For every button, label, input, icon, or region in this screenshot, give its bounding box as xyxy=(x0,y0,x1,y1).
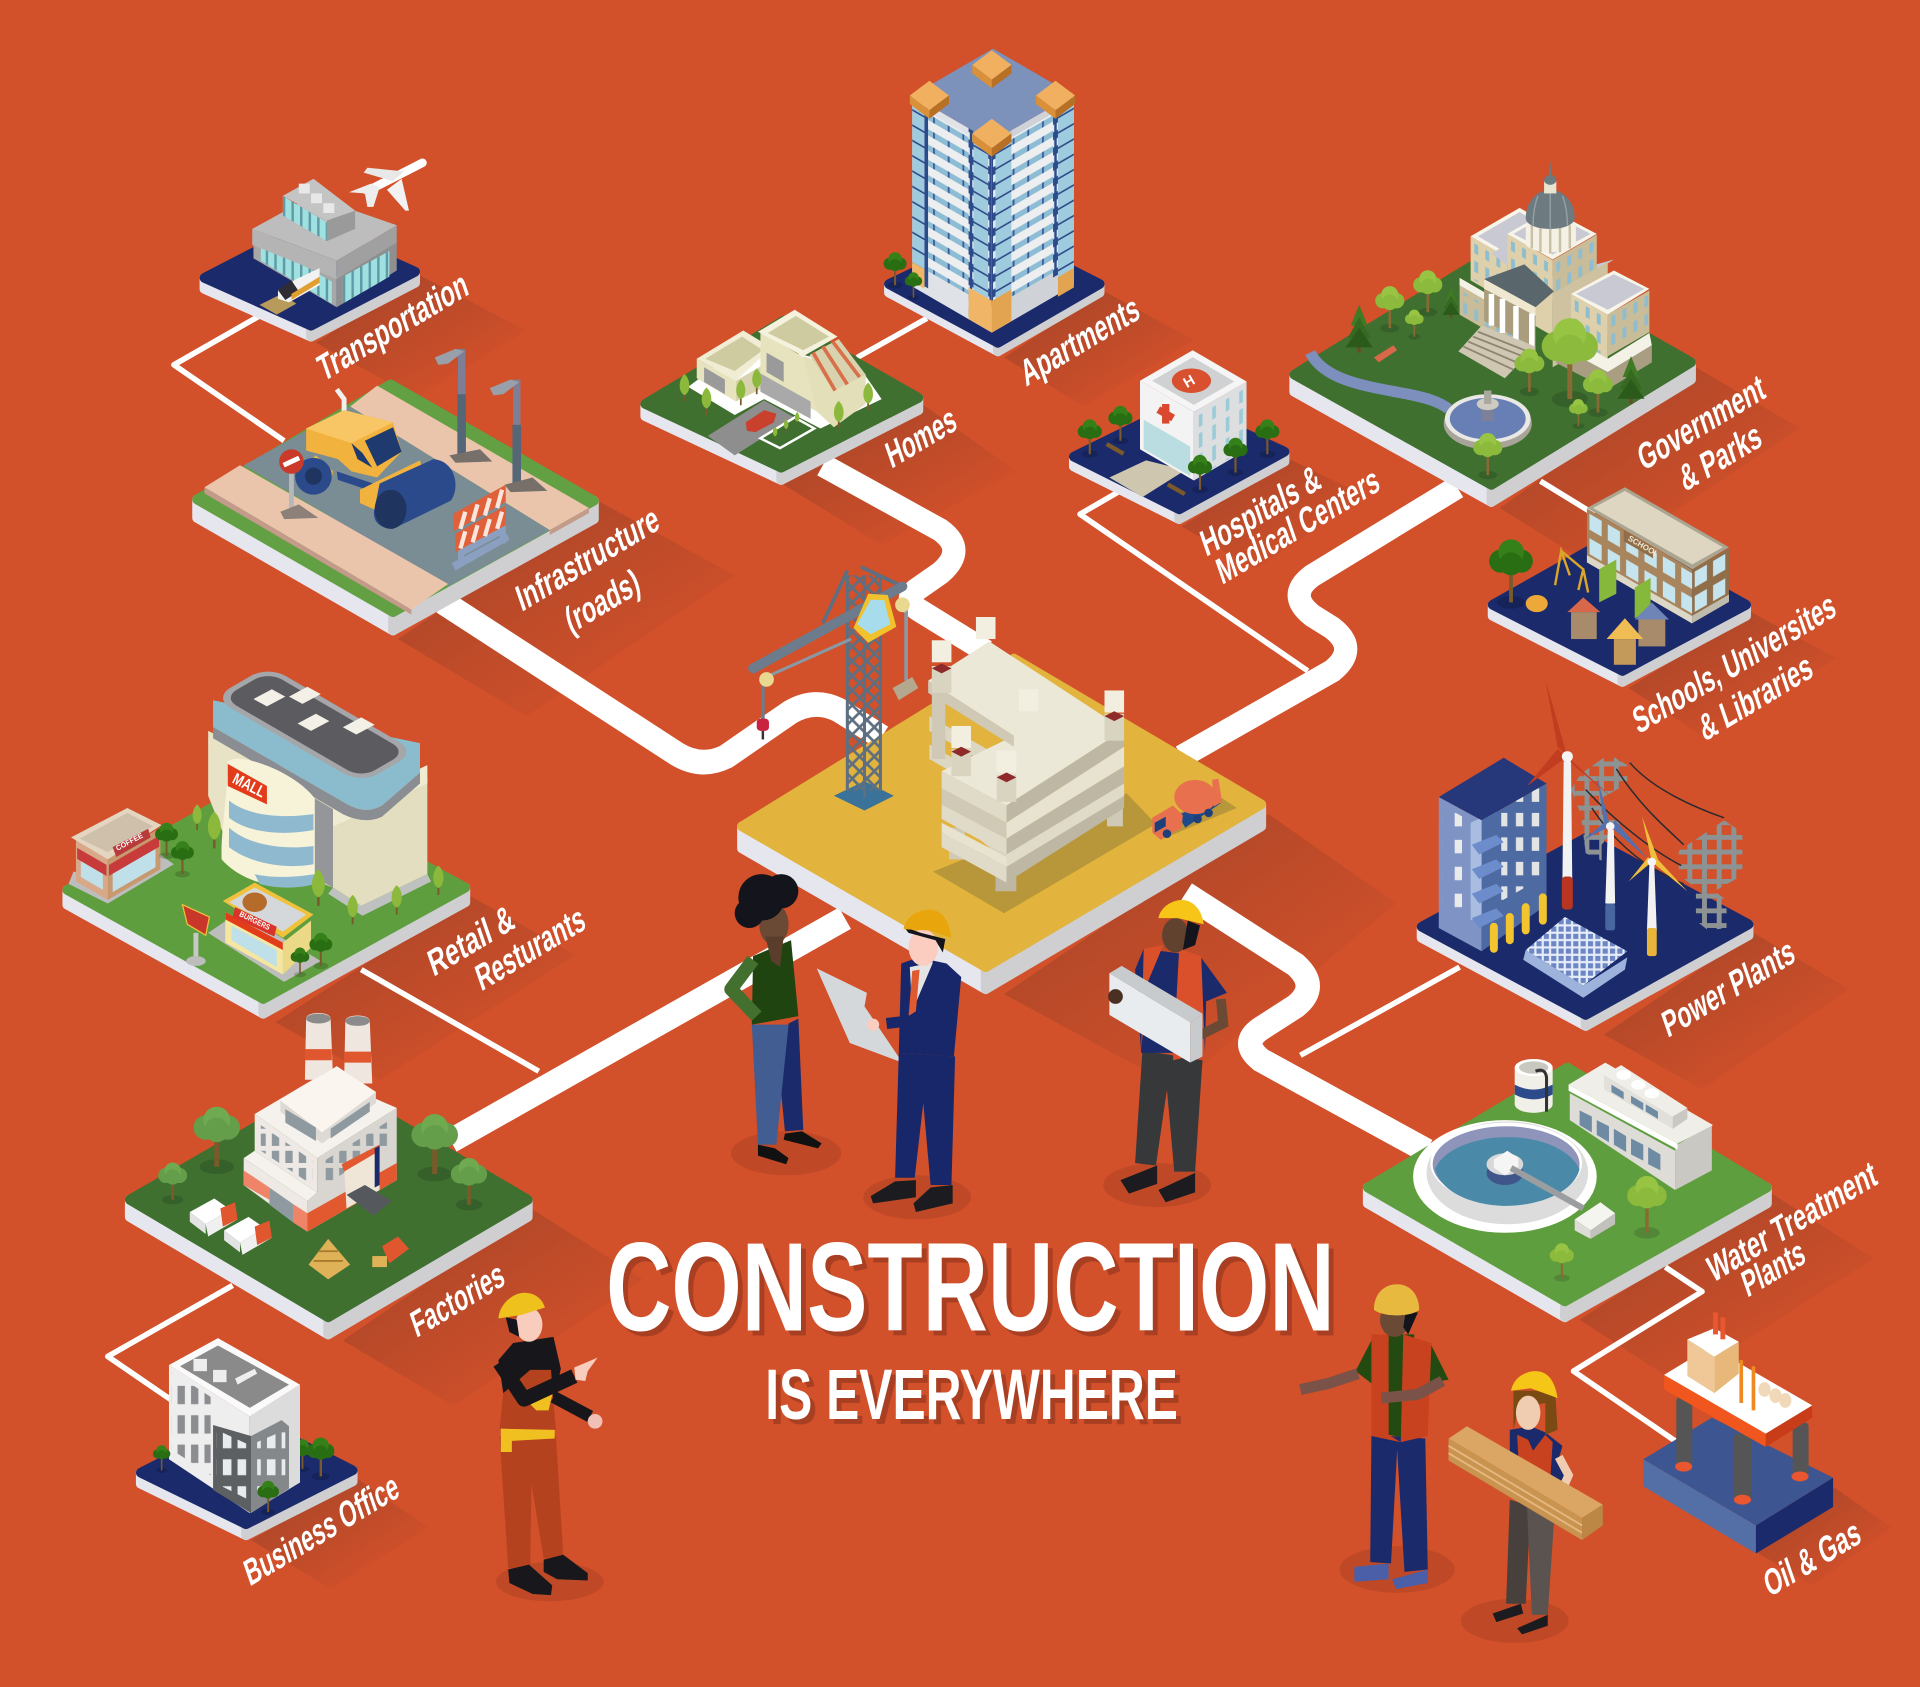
icon: shopping mall: MALL xyxy=(230,771,268,802)
label: Power Plants: Power Plants xyxy=(1657,930,1799,1046)
platform xyxy=(1294,251,1691,502)
platform cast shadows xyxy=(251,275,1892,1589)
label: Transportation: Transportation xyxy=(313,263,473,390)
icon: street lamps xyxy=(435,349,547,492)
title: CONSTRUCTION xyxy=(606,1217,1335,1358)
icon: burger restaurant xyxy=(208,883,321,982)
label: Hospitals & Medical Centers xyxy=(1196,456,1384,593)
icon: storage tank xyxy=(1515,1059,1553,1113)
panel: Schools, Universites & Libraries xyxy=(1489,487,1840,750)
icon: cement mixer truck xyxy=(1152,779,1237,840)
platform xyxy=(889,233,1100,351)
icon: road roller xyxy=(295,389,456,529)
label: Retail & Resturants: Resturants xyxy=(471,897,590,999)
label: Factories: Factories xyxy=(406,1253,509,1346)
water base xyxy=(1643,1418,1833,1554)
panel: Retail & Resturants xyxy=(67,666,590,1014)
icon: burger sign xyxy=(182,905,209,966)
icon: shopping mall xyxy=(208,666,431,916)
panel: Water Treatment Plants xyxy=(1368,1059,1882,1317)
icon: apartment tower xyxy=(910,49,1075,335)
label: Hospitals & Medical Centers: Hospitals & xyxy=(1196,456,1325,565)
platform xyxy=(130,1083,528,1334)
figure: worker pointing xyxy=(496,1293,604,1601)
label: Government & Parks xyxy=(1633,366,1770,500)
panel: Hospitals & Medical Centers xyxy=(1074,350,1384,593)
panel: Oil & Gas xyxy=(1643,1312,1865,1605)
icon: hospital building xyxy=(1140,350,1247,481)
icon: river xyxy=(1310,353,1449,409)
figure: worker carrying planks xyxy=(1449,1371,1603,1643)
icon: trees xyxy=(1550,1176,1667,1282)
label: Schools, Universites & Libraries: & Libraries xyxy=(1694,645,1817,750)
road surface xyxy=(204,386,589,615)
icon: smokestacks xyxy=(305,1013,372,1083)
figure: worker holding plans xyxy=(1103,900,1227,1207)
figure: woman with afro xyxy=(731,874,841,1175)
icon: school building: SCHOOL xyxy=(1626,534,1660,559)
panel: Transportation xyxy=(204,163,473,390)
icon: office building xyxy=(169,1338,300,1513)
title: IS EVERYWHERE xyxy=(765,1356,1178,1435)
panel: Infrastructure (roads) xyxy=(197,349,664,642)
platform xyxy=(67,779,465,1014)
figure: worker gesturing xyxy=(1300,1284,1455,1593)
icon: trees xyxy=(884,252,922,300)
label: Apartments: Apartments xyxy=(1016,287,1144,395)
label: Water Treatment Plants: Plants xyxy=(1737,1231,1810,1305)
icon: pallet of boxes xyxy=(309,1239,350,1279)
icon: walkway xyxy=(1109,460,1185,497)
figure: man in suit with blueprint xyxy=(817,910,971,1219)
platform xyxy=(197,384,594,630)
label: Infrastructure (roads) xyxy=(511,498,664,642)
label: Infrastructure (roads): Infrastructure xyxy=(511,498,664,620)
connector road network xyxy=(108,316,1702,1441)
panel: Government & Parks xyxy=(1294,160,1770,502)
icon: delivery trucks xyxy=(190,1199,272,1255)
icon: clarifier pool xyxy=(1413,1120,1597,1233)
label: Water Treatment Plants xyxy=(1703,1153,1882,1305)
title xyxy=(606,1217,1335,1435)
platform xyxy=(645,321,918,480)
label: Business Office: Business Office xyxy=(239,1465,404,1594)
icon: wind turbines xyxy=(1527,679,1687,956)
label: Homes: Homes xyxy=(881,398,961,477)
icon: road barrier xyxy=(452,485,509,570)
label: Government & Parks: Government xyxy=(1633,366,1770,479)
panel: central construction site xyxy=(742,567,1261,989)
icon: trees xyxy=(155,804,444,977)
icon: houses xyxy=(680,310,873,428)
icon: fountain xyxy=(1444,391,1532,449)
bottom floor frame xyxy=(942,766,1124,891)
label: Schools, Universites & Libraries xyxy=(1628,584,1840,750)
label: Government & Parks: & Parks xyxy=(1674,414,1766,500)
label: Oil & Gas: Oil & Gas xyxy=(1759,1511,1865,1605)
panel: Apartments xyxy=(884,49,1144,395)
icon: trees and bench xyxy=(1346,270,1645,479)
icon: coffee shop xyxy=(69,808,174,903)
icon: hospital building: H xyxy=(1181,373,1198,392)
icon: train xyxy=(260,268,320,315)
platform xyxy=(1422,837,1749,1026)
icon: burger restaurant: BURGERS xyxy=(238,909,272,932)
icon: tower crane xyxy=(753,567,918,810)
icon: forklift xyxy=(372,1236,409,1267)
icon: trees behind xyxy=(292,1439,313,1472)
panel: Homes xyxy=(645,310,961,480)
platform xyxy=(141,1418,353,1535)
icon: capitol building xyxy=(1458,160,1652,389)
platform xyxy=(1074,404,1284,519)
icon: power building xyxy=(1439,758,1547,951)
label: Infrastructure (roads): (roads) xyxy=(560,561,645,642)
platform xyxy=(1368,1068,1767,1317)
icon: concrete block xyxy=(1575,1202,1615,1239)
platform xyxy=(1493,534,1746,682)
icon: factory building xyxy=(244,1066,397,1232)
platform xyxy=(742,659,1261,989)
icon: school building xyxy=(1587,487,1729,623)
icon: oil rig xyxy=(1664,1312,1812,1505)
icon: solar panels xyxy=(1523,917,1627,998)
icon: trees xyxy=(158,1107,487,1210)
panel: Factories xyxy=(130,1013,528,1346)
icon: concrete structure under construction xyxy=(928,617,1124,891)
icon: transmission pylons and wires xyxy=(1571,754,1742,930)
platform xyxy=(204,224,415,337)
icon: terminal building xyxy=(252,179,397,307)
label: Retail & Resturants: Retail & xyxy=(423,897,519,985)
panel: Power Plants xyxy=(1422,679,1799,1046)
icon: plant building xyxy=(1569,1063,1713,1190)
label: Hospitals & Medical Centers: Medical Centers xyxy=(1212,459,1384,593)
icon: no-entry sign xyxy=(279,449,318,519)
icon: airplane xyxy=(349,163,422,211)
panel: Business Office xyxy=(141,1338,404,1594)
icon: driveway and car xyxy=(688,343,882,455)
icon: playground xyxy=(1489,539,1669,665)
label: Retail & Resturants xyxy=(423,897,590,999)
icon: trees and benches xyxy=(1078,406,1279,496)
icon: coffee shop: COFFEE xyxy=(114,831,145,853)
icon: trees xyxy=(153,1437,334,1515)
